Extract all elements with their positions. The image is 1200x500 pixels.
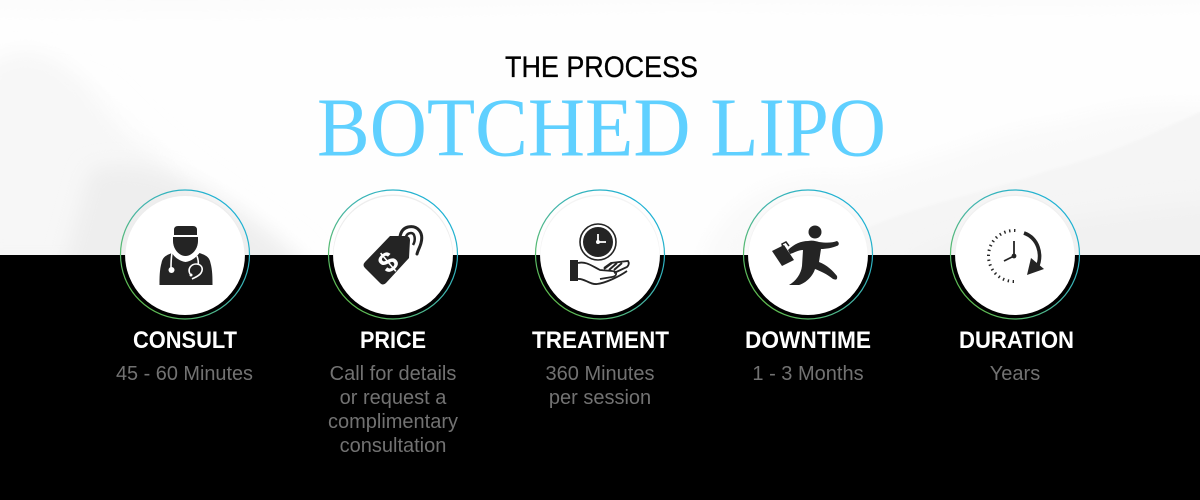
item: downtime [744, 190, 872, 385]
item: duration [950, 190, 1080, 385]
circle badge: price [328, 190, 458, 319]
label: price: PRICE [360, 327, 426, 354]
label: duration: DURATION [959, 327, 1074, 354]
label: downtime: DOWNTIME [745, 327, 871, 354]
icon: running businessman [772, 226, 839, 285]
icon: price tag: $ [372, 245, 405, 280]
value: treatment: per session [549, 387, 651, 409]
icon: clock with arrow [988, 226, 1051, 286]
circle badge: treatment [536, 190, 664, 319]
value: treatment: 360 Minutes [546, 363, 654, 385]
item: treatment [532, 190, 669, 409]
background: silk waves [0, 0, 1200, 280]
value: price: Call for details [330, 363, 456, 385]
icon: clock in hand [570, 224, 629, 284]
value: duration: Years [990, 363, 1040, 385]
title: botched lipo: BOTCHED LIPO [317, 82, 886, 174]
black lower band [0, 255, 1200, 500]
value: treatment [546, 363, 654, 409]
icon: doctor [160, 226, 212, 285]
circle badge: downtime [744, 190, 872, 319]
icon: price tag [364, 227, 422, 284]
circle badge: consult [120, 190, 250, 319]
item: consult [116, 190, 253, 385]
value: price: consultation [340, 435, 446, 457]
value: price: complimentary [328, 411, 458, 433]
value: price [328, 363, 458, 457]
heading: the process: THE PROCESS [505, 51, 698, 84]
item: price [328, 190, 458, 457]
value: consult: 45 - 60 Minutes [116, 363, 253, 385]
circle badge: duration [950, 190, 1080, 319]
value: price: or request a [340, 387, 447, 409]
label: consult: CONSULT [133, 327, 237, 354]
label: treatment: TREATMENT [532, 327, 669, 354]
value: downtime: 1 - 3 Months [752, 363, 864, 385]
